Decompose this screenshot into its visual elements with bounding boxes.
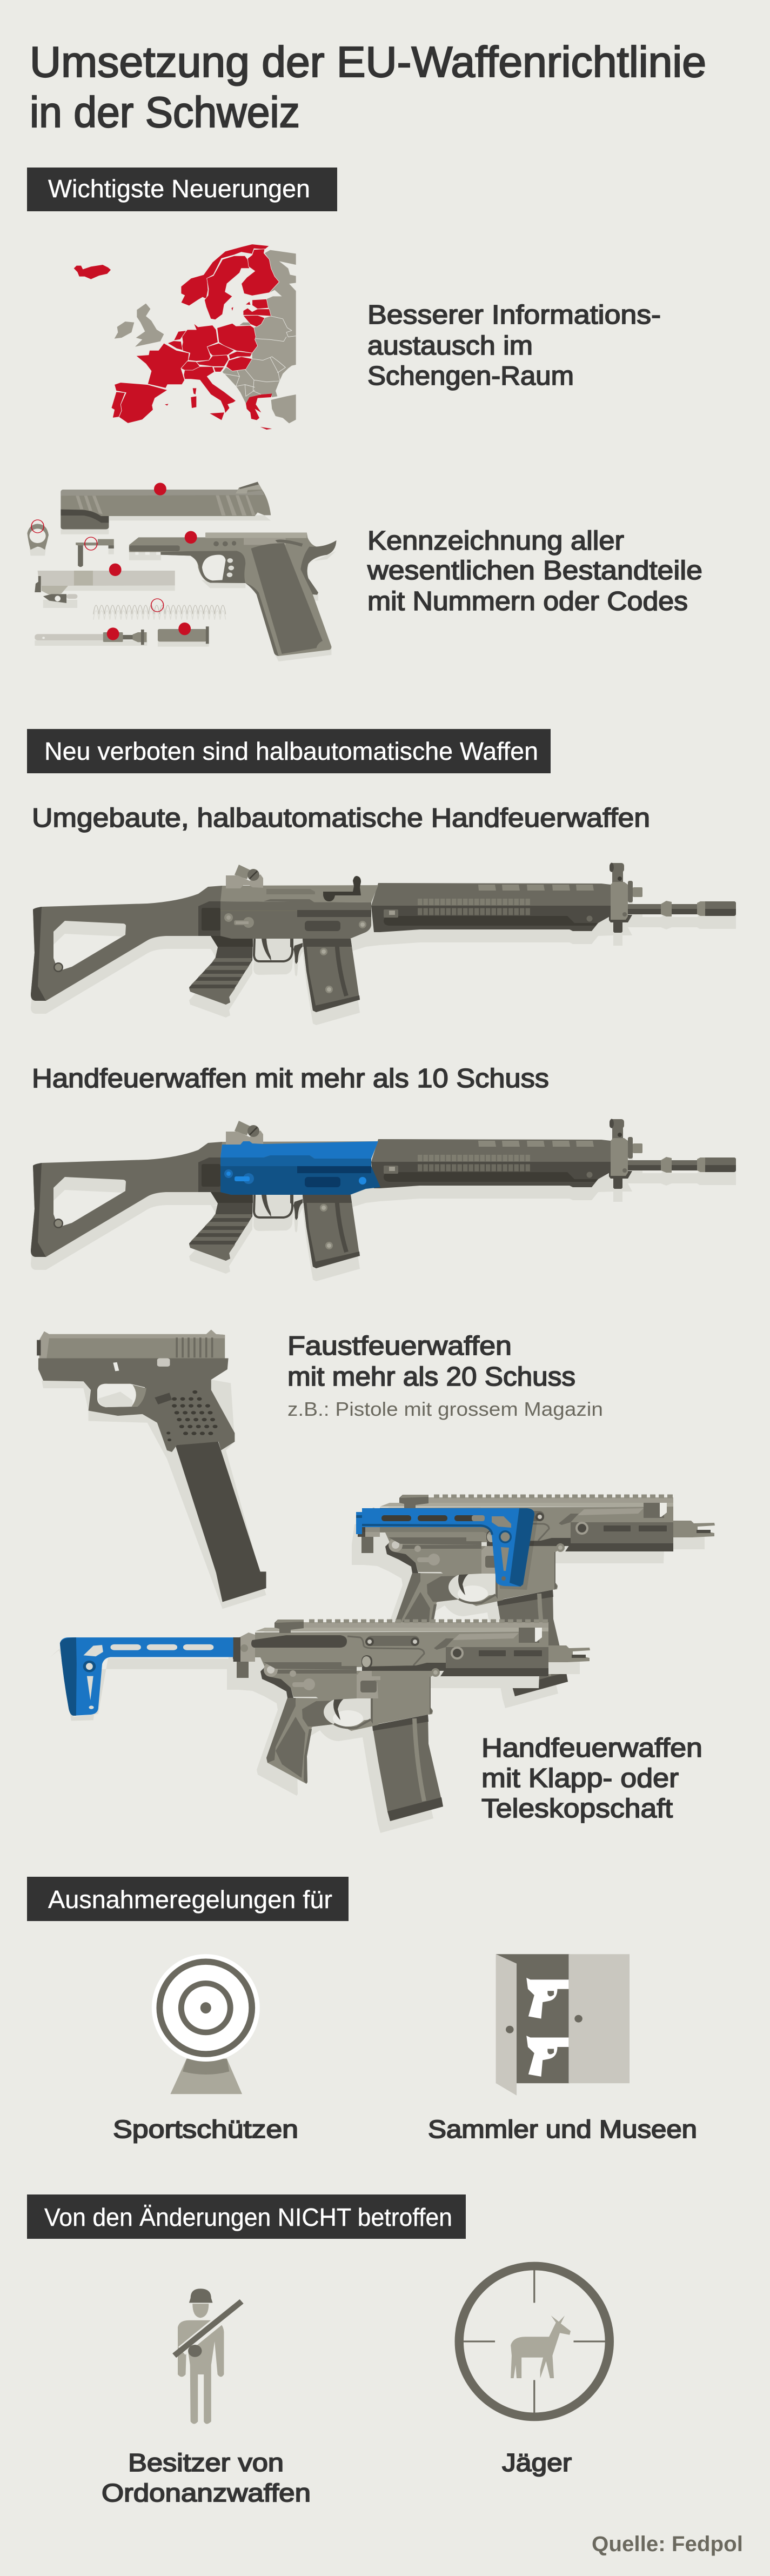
icon: deer in scope — [459, 2266, 610, 2417]
text: marking of parts: Kennzeichnung aller — [367, 526, 624, 556]
icon: gun cabinet — [496, 1954, 630, 2096]
section header: Neu verboten: Neu verboten sind halbautomatische Waffen — [44, 737, 538, 765]
text: folding or telescopic stock: Teleskopschaft — [481, 1794, 673, 1823]
text: marking of parts: mit Nummern oder Codes — [367, 587, 688, 616]
blue stock — [50, 1637, 233, 1721]
label: Sportschützen: Sportschützen — [113, 2115, 298, 2143]
section header: NICHT betroffen — [27, 2194, 466, 2239]
text: handguns with more than 20 rounds: Faustfeuerwaffen — [287, 1332, 512, 1361]
section header: NICHT betroffen: Von den Änderungen NICHT betroffen — [44, 2203, 452, 2231]
shadow — [42, 1380, 266, 1609]
text: handguns with more than 20 rounds — [287, 1332, 603, 1420]
heading: more than 10 rounds: Handfeuerwaffen mit mehr als 10 Schuss — [32, 1064, 549, 1093]
text: marking of parts: wesentlichen Bestandteile — [367, 556, 702, 585]
illustration: exploded pistol with marked parts — [27, 482, 336, 661]
source: Quelle: Fedpol — [592, 2532, 743, 2556]
text: handguns with more than 20 rounds: mit mehr als 20 Schuss — [287, 1362, 575, 1391]
label: Sammler und Museen: Sammler und Museen — [428, 2115, 697, 2143]
section header: Neu verboten — [27, 729, 551, 773]
bushing — [158, 629, 207, 641]
text: folding or telescopic stock: mit Klapp- oder — [481, 1764, 679, 1793]
text: information exchange: austausch im — [367, 331, 533, 360]
parts shadow — [29, 515, 336, 661]
section header: Ausnahmeregelungen: Ausnahmeregelungen für — [48, 1885, 332, 1913]
carbine: extended stock (front) — [50, 1620, 590, 1833]
barrel — [38, 571, 175, 596]
magazine — [175, 1440, 266, 1602]
slide — [61, 482, 271, 529]
label: Besitzer von Ordonanzwaffen: Ordonanzwaffen — [102, 2479, 311, 2507]
title: Umsetzung der EU-Waffenrichtlinie — [30, 38, 706, 86]
label: Besitzer von Ordonanzwaffen — [102, 2448, 311, 2507]
text: folding or telescopic stock — [481, 1734, 702, 1823]
label: Besitzer von Ordonanzwaffen: Besitzer von — [128, 2448, 284, 2477]
text: information exchange: Schengen-Raum — [367, 362, 574, 391]
guide rod — [35, 634, 105, 640]
ring part — [27, 524, 49, 550]
map: Schengen area in Europe — [74, 244, 296, 430]
text: information exchange — [367, 300, 661, 391]
grip stipple — [166, 1390, 218, 1441]
frame — [38, 1359, 235, 1452]
label: Jäger: Jäger — [502, 2448, 572, 2477]
pistol with extended magazine — [37, 1330, 266, 1609]
slide — [39, 1330, 225, 1359]
red markers — [107, 483, 197, 640]
heading: converted rifles: Umgebaute, halbautomatische Handfeuerwaffen — [32, 804, 650, 833]
title: in der Schweiz — [30, 88, 300, 136]
L shaped pin — [76, 539, 114, 567]
section header: Wichtigste Neuerungen — [27, 168, 337, 211]
pistol frame — [129, 533, 336, 656]
section header: Ausnahmeregelungen — [27, 1877, 349, 1921]
title — [30, 38, 706, 136]
blue folded stock — [356, 1508, 538, 1590]
icon: soldier with rifle — [175, 2289, 242, 2424]
rifle: converted semi-automatic — [31, 862, 736, 1025]
text: information exchange: Besserer Informations- — [367, 300, 661, 330]
example note: z.B.: Pistole mit grossem Magazin — [287, 1398, 603, 1420]
text: folding or telescopic stock: Handfeuerwaffen — [481, 1734, 702, 1763]
text: marking of parts — [367, 526, 702, 616]
section header: Wichtigste Neuerungen: Wichtigste Neuerungen — [48, 175, 310, 203]
carbine: folded stock (back) — [352, 1495, 715, 1708]
rifle: blue receiver — [31, 1119, 736, 1281]
spring — [93, 611, 226, 620]
icon: shooting target — [152, 1954, 260, 2094]
